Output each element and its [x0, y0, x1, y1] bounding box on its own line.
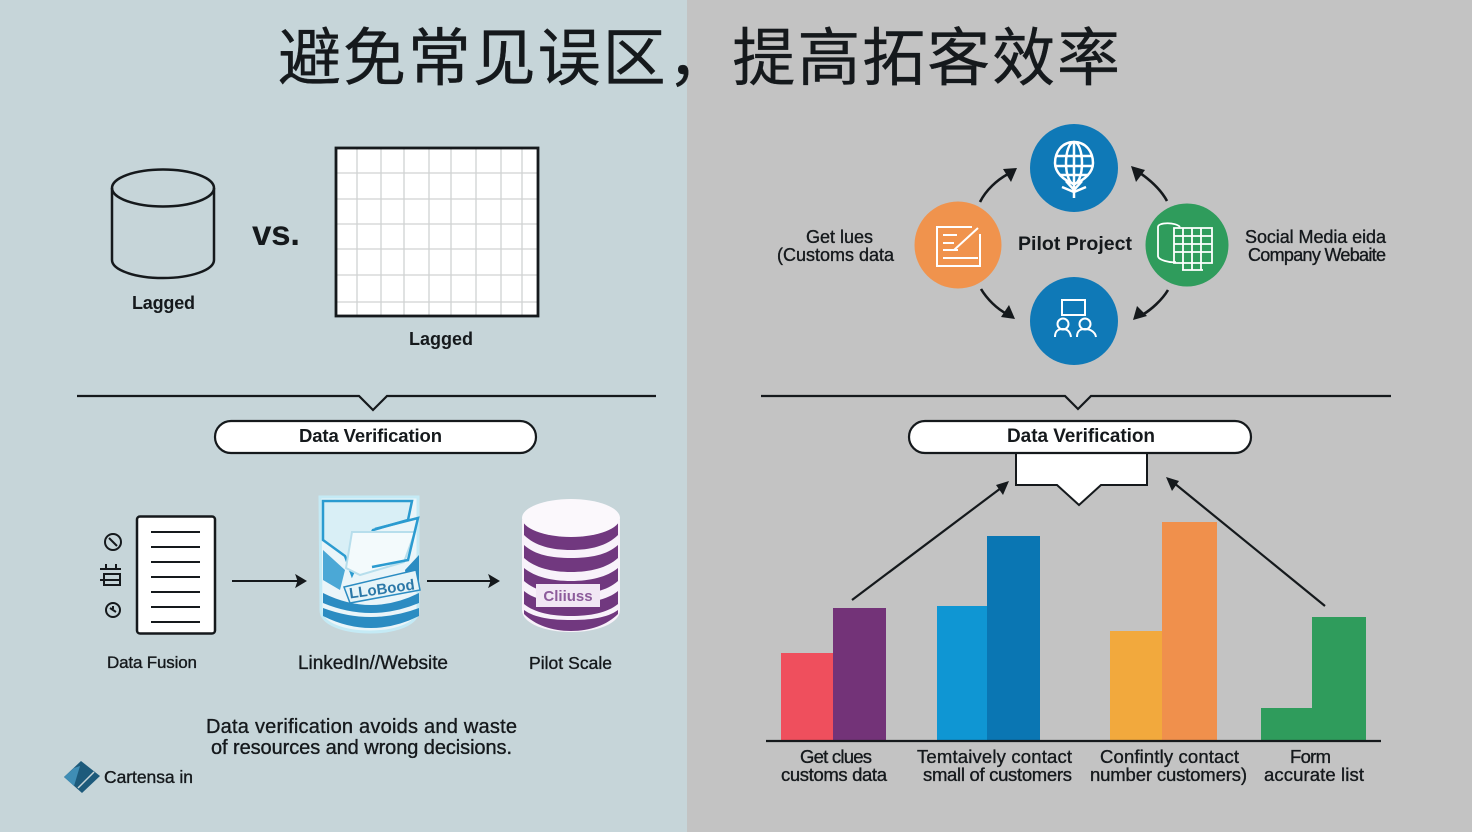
axis labels — [781, 746, 1364, 785]
right pill heading with callout: Data Verification — [1007, 426, 1155, 447]
labels: flow steps — [107, 653, 612, 674]
label: cylinder lagged: Lagged — [132, 293, 195, 313]
bars: group 3 — [1110, 631, 1163, 740]
label: social media: Social Media eida — [1245, 227, 1387, 247]
right pill heading with callout — [909, 421, 1251, 505]
label: get clues: Get lues — [806, 227, 873, 247]
bars: group 2 — [937, 606, 988, 740]
axis labels: customs data — [781, 764, 888, 785]
baseline — [766, 740, 1381, 742]
panel: data flow — [100, 497, 620, 674]
text block: conclusion: Data verification avoids and waste — [206, 716, 517, 738]
bar chart — [766, 522, 1381, 785]
labels: flow steps: Data Fusion — [107, 653, 197, 672]
title: 避免常见误区，提高拓客效率 — [278, 24, 1120, 94]
logo: Cartensa in — [104, 767, 193, 787]
left divider with pointer — [77, 396, 656, 410]
text block: conclusion: of resources and wrong decisions. — [211, 737, 512, 759]
icon: blue database with folder — [320, 497, 420, 632]
axis labels: Get clues — [800, 746, 872, 767]
arrow — [427, 575, 499, 587]
arrows: cycle — [980, 166, 1168, 320]
arrow: up to verification right — [1166, 477, 1325, 606]
bars: group 1 — [781, 653, 834, 740]
icon: small side icons — [100, 534, 121, 617]
arrow: up to verification left — [852, 481, 1009, 600]
logo — [64, 761, 193, 793]
icon: empty cylinder — [112, 170, 214, 278]
axis labels: small of customers — [923, 764, 1072, 785]
left pill heading: Data Verification — [299, 425, 442, 446]
icon: blue database with folder: LLoBood — [348, 577, 416, 603]
labels: flow steps: LinkedIn//Website — [298, 653, 448, 674]
node: people screen — [1030, 277, 1118, 365]
left pill heading — [215, 421, 536, 453]
axis labels: Form — [1290, 746, 1331, 767]
icon: purple database: Cliiuss — [543, 588, 593, 605]
axis labels: number customers) — [1090, 764, 1247, 785]
vs label: vs. — [252, 214, 300, 253]
node: orange checklist — [914, 202, 1002, 288]
icon: purple database — [522, 499, 620, 632]
icon: document — [137, 516, 215, 634]
icon: empty table grid — [336, 148, 538, 316]
center label: Pilot Project — [1018, 233, 1132, 255]
label: get clues — [777, 227, 895, 265]
right divider with pointer — [761, 396, 1391, 409]
axis labels: accurate list — [1264, 764, 1364, 785]
arrow — [232, 575, 306, 587]
axis labels: Temtaively contact — [917, 746, 1072, 767]
axis labels: Confintly contact — [1100, 746, 1239, 767]
label: get clues: (Customs data — [777, 245, 895, 265]
node: green database table — [1146, 204, 1228, 286]
bars: group 4 — [1261, 708, 1313, 740]
node: globe — [1030, 124, 1118, 212]
label: social media: Company Webaite — [1248, 245, 1386, 265]
label: social media — [1245, 227, 1387, 265]
panel: pilot project cycle — [777, 124, 1387, 365]
labels: flow steps: Pilot Scale — [529, 653, 612, 673]
panel: left comparison — [112, 148, 538, 349]
label: table lagged: Lagged — [409, 329, 473, 349]
text block: conclusion — [206, 716, 517, 759]
